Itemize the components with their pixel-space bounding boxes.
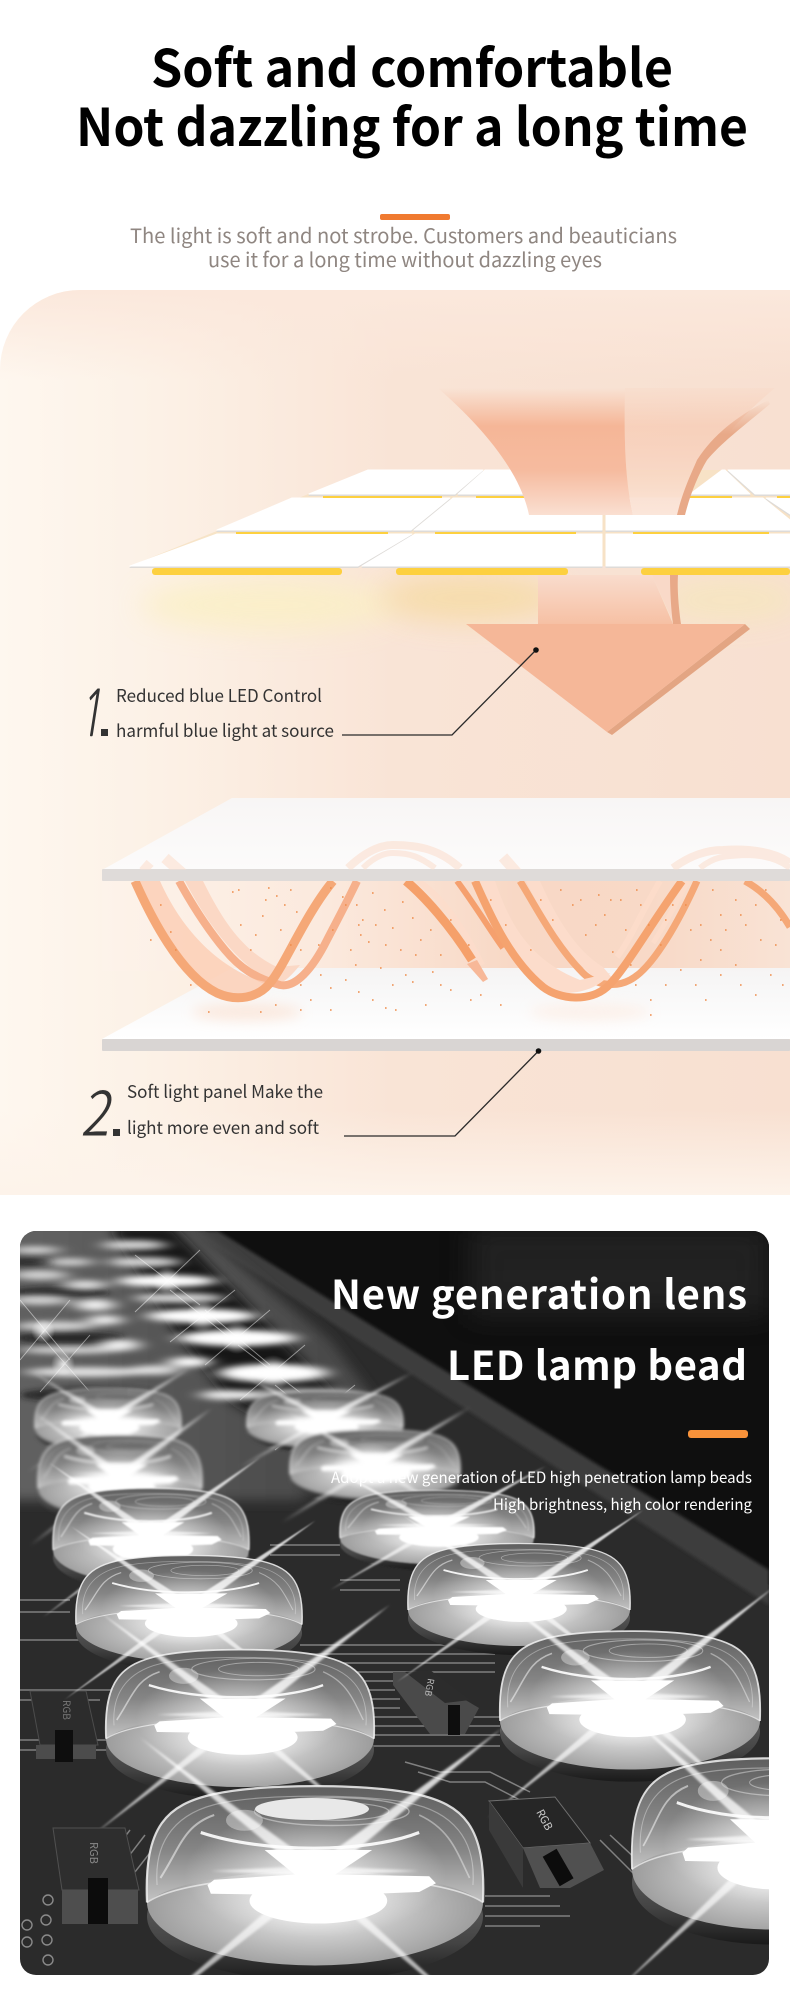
mid lamp beads [28,1368,470,1546]
circuit pads [22,1895,53,1965]
accent bar [688,1430,748,1438]
floating light particles [150,888,784,1015]
callout 2 leader line [344,1048,541,1136]
star glare over text [340,1444,386,1463]
subtitle [130,220,677,273]
callout 2 number: 2 [80,1062,113,1155]
callout 1 text: harmful blue light at source [116,718,334,743]
resistor chip lower left [53,1828,139,1924]
panel: LED lamp bead photo [5,1220,790,1992]
callout 2 text [128,1084,322,1138]
title [76,27,748,161]
description: Adopt a new generation of LED high penetration lamp beads [331,1466,752,1488]
callout 2 text: Soft light panel Make the [127,1079,323,1104]
title: Soft and comfortable [151,27,673,102]
callout 2 number [82,1090,120,1136]
circuit traces [20,1545,650,1926]
title: Not dazzling for a long time [76,86,748,161]
LED tiles [130,470,790,575]
heading [334,1276,746,1388]
description [331,1470,752,1514]
resistor chip lower right [489,1797,604,1888]
accent bar [380,214,450,220]
lamp bead row 3 [65,1510,643,1699]
heading: LED lamp bead [447,1334,747,1392]
near-mid lamp beads [43,1457,546,1617]
far lamp beads (blurred) [5,1225,360,1450]
callout 2 text: light more even and soft [127,1115,319,1140]
light wave ribbons [135,881,790,1015]
resistor chip mid: RGB [422,1677,438,1697]
heading: New generation lens [331,1263,747,1321]
resistor chip mid [393,1670,479,1735]
lamp bead row 2 [93,1586,776,1835]
subtitle: use it for a long time without dazzling eyes [208,244,602,273]
arrow: light flowing down [438,388,775,735]
description: High brightness, high color rendering [493,1493,752,1515]
callout 1 text [118,688,334,741]
resistor chip lower right: RGB [532,1806,557,1833]
callout 1 number: 1 [78,681,102,746]
lamp bead front [146,1728,501,1975]
resistor chip small left: RGB [60,1700,75,1720]
upper diffuser sheet [102,798,790,881]
resistor chip lower left: RGB [86,1842,102,1864]
callout 1 text: Reduced blue LED Control [116,683,322,708]
panel: soft light layers [0,290,790,1195]
callout 1 number [90,688,108,736]
resistor chip small left [30,1691,98,1762]
lower diffuser sheet [102,968,790,1051]
lamp bead right edge [630,1736,769,1975]
subtitle: The light is soft and not strobe. Customers and beauticians [130,220,677,249]
callout 1 leader line [342,647,539,735]
faded ribbons above upper sheet [140,841,790,870]
